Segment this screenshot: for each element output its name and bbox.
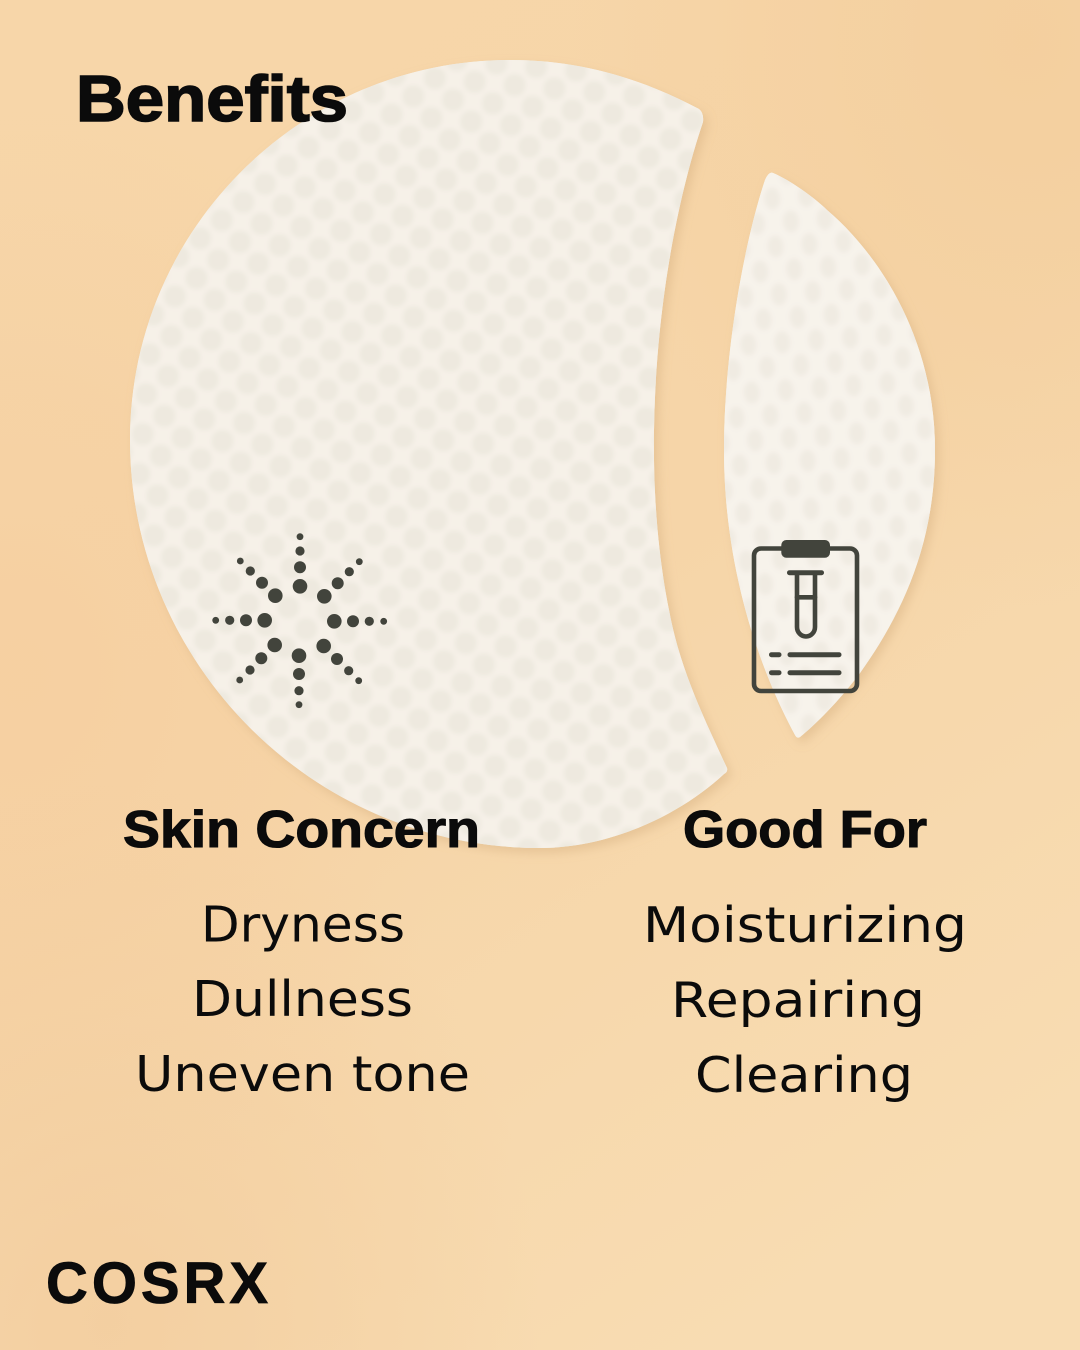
good for list: Clearing: [695, 1047, 913, 1104]
skin concern list: [135, 896, 470, 1103]
icon: radiant dots sunburst: [212, 533, 387, 708]
skin concern list: Dullness: [192, 971, 413, 1028]
large crescent eye patch: [130, 60, 730, 854]
small crescent eye patch: [724, 172, 940, 741]
skin concern list: Uneven tone: [135, 1046, 470, 1103]
skin concern list: Dryness: [201, 896, 405, 954]
good for list: [643, 897, 967, 1104]
good for list: Repairing: [671, 972, 925, 1029]
brand logo: COSRX: COSRX: [46, 1251, 268, 1316]
heading: Good For: Good For: [683, 801, 927, 859]
good for list: Moisturizing: [643, 897, 967, 954]
title: Benefits: [76, 62, 348, 135]
icon: clipboard with test tube: [754, 540, 857, 691]
heading: Skin Concern: Skin Concern: [123, 801, 480, 859]
